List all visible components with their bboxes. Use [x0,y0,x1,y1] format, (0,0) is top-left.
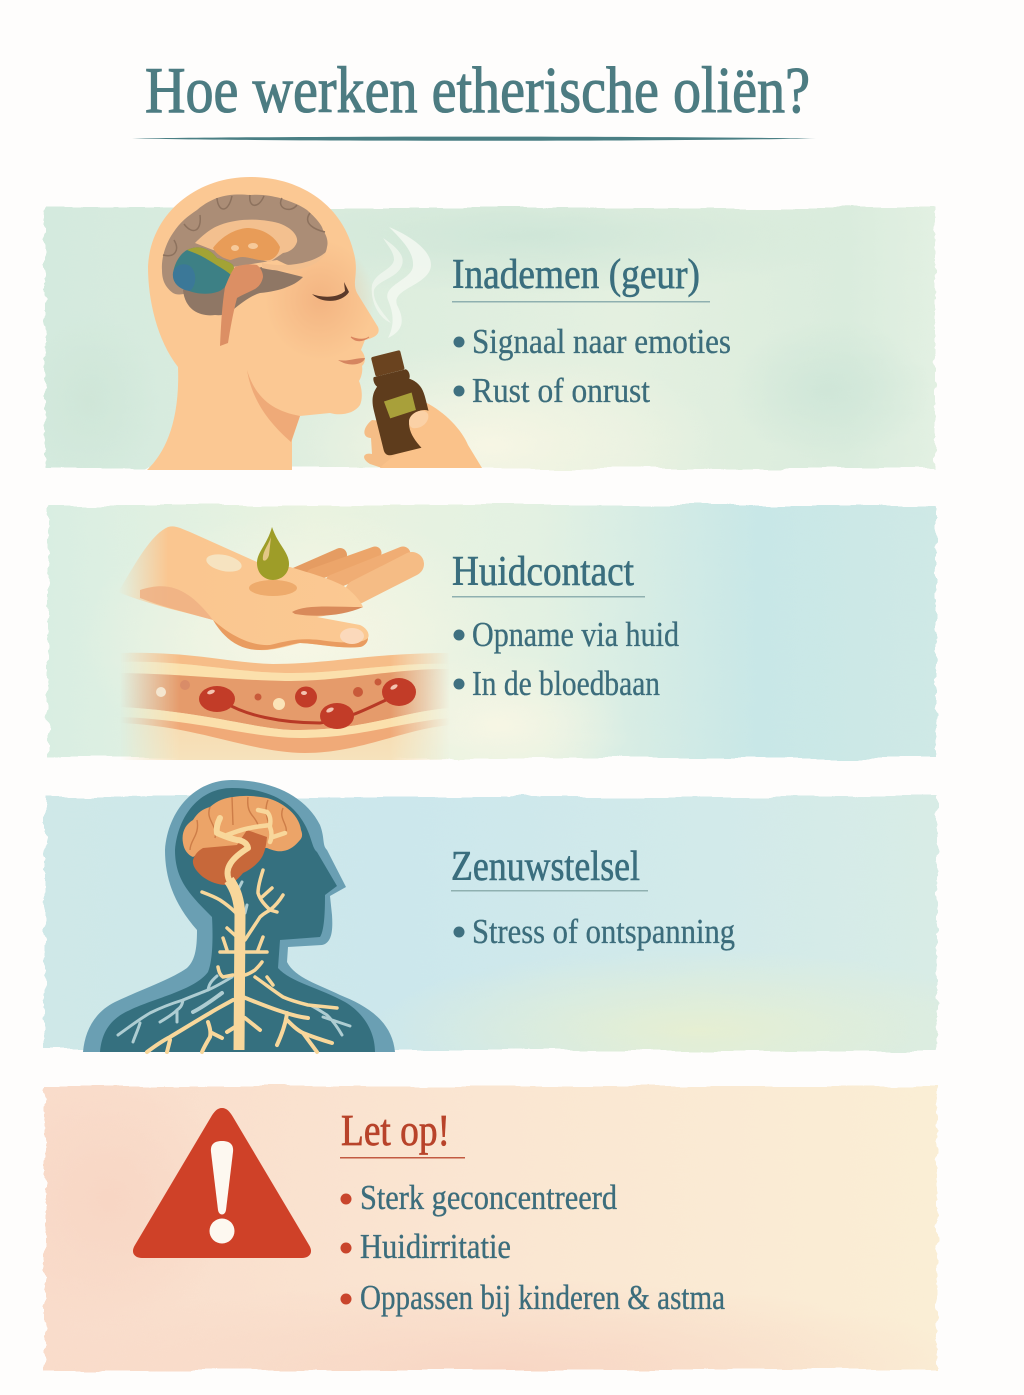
cerebellum [183,267,303,315]
bullet: sterk: Sterk geconcentreerd [360,1178,617,1217]
cerebrum [183,796,302,857]
head silhouette [147,177,379,470]
heading: zenuwstelsel: Zenuwstelsel [451,844,640,890]
blood strand [226,698,390,723]
outer silhouette [83,780,395,1052]
hand [380,402,482,468]
wrist highlight [205,551,243,575]
nerves: warm [147,810,337,1052]
icon: warning triangle [133,1108,311,1258]
wrist shadow [140,586,213,620]
palm hollow [249,580,297,596]
thumb nail [340,628,364,644]
outer skin [128,662,442,760]
bottle [361,347,437,457]
small particles [156,678,382,710]
scent wisps [387,227,431,338]
inner silhouette [100,788,375,1052]
cerebrum folds [190,797,286,850]
heading: inademen: Inademen (geur) [452,252,700,298]
thalamus [213,228,280,260]
red blood cells [199,678,416,729]
title: Hoe werken etherische oliën? [145,54,810,127]
illustration: head with brain smelling a bottle [147,177,482,470]
closed eye [312,282,349,301]
vessel [120,653,450,760]
bullet: bloedbaan: In de bloedbaan [472,664,660,703]
panel: let op [42,1084,940,1372]
heading underline [452,301,710,302]
face shading [265,240,375,360]
nerves: light [118,882,350,1042]
bottle body [366,366,437,457]
back fingers [364,420,430,468]
panel: huidcontact [44,502,938,761]
lower band [120,717,450,753]
limbic olive cap [187,247,234,277]
nostril [351,337,369,341]
limbic blue [173,264,195,291]
bottle label [383,392,416,419]
heading underline [340,1157,465,1158]
highlights [231,245,239,251]
panel background: blue watercolor [42,794,940,1053]
brain stem [220,264,263,346]
panel background: green watercolor [42,205,937,471]
thumb nail [409,411,428,428]
title underline [132,137,816,141]
panel background: green to blue watercolor [44,502,938,761]
limbic region [173,247,234,294]
heading underline [452,596,645,598]
bullet: opname: Opname via huid [472,615,679,654]
panel background: peach watercolor [42,1084,940,1372]
panel: inademen [42,177,937,471]
panel: zenuwstelsel [42,780,940,1054]
upper tissue band [120,653,450,673]
inner ring [195,220,297,262]
brain [162,194,328,346]
bullet: stress: Stress of ontspanning [472,912,735,951]
thumb gap [292,606,363,616]
illustration: head with nervous system [83,780,395,1052]
fingers [292,553,412,592]
heading: huidcontact: Huidcontact [452,549,634,595]
lumen [120,669,450,730]
lower cream stripe [148,709,425,738]
cerebellum [193,830,267,885]
heading underline [451,890,648,892]
heading: let op: Let op! [341,1106,450,1155]
bullet: huidirritatie: Huidirritatie [360,1227,511,1266]
illustration: hand and blood vessel [118,526,450,760]
hand lower edge [213,620,368,650]
oil drop [257,527,289,580]
neck shadow [247,370,300,442]
bottle cap [371,350,405,377]
cortex folds [163,195,325,256]
fornix stripe [262,252,326,271]
lips [338,358,365,364]
bullet: oppassen: Oppassen bij kinderen & astma [360,1278,725,1317]
bullet: signaal: Signaal naar emoties [472,322,731,361]
hand [118,526,369,650]
cortex [162,194,328,294]
bullet: rust: Rust of onrust [472,371,650,410]
thumb [409,410,468,468]
cream stripe [151,662,417,681]
